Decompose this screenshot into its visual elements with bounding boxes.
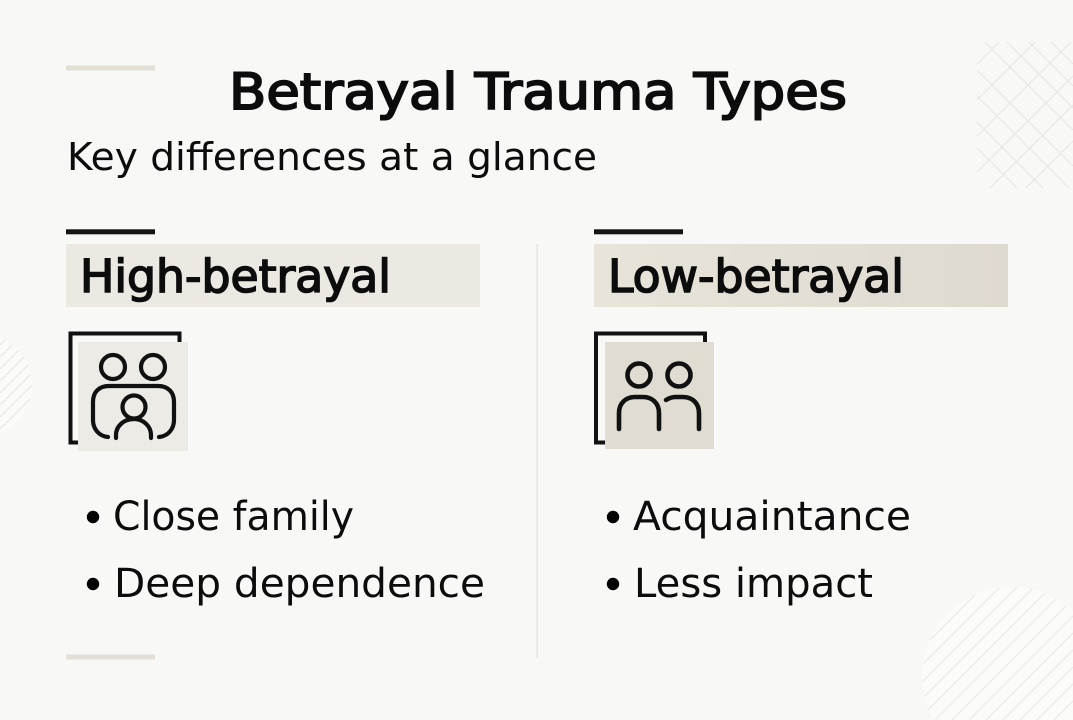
bullet list: high-betrayal bbox=[87, 494, 485, 607]
heading: low-betrayal: Low-betrayal bbox=[608, 250, 904, 303]
bullet list: low-betrayal: Acquaintance bbox=[633, 494, 911, 540]
bottom accent line bbox=[66, 654, 155, 660]
bullet list: high-betrayal: Close family bbox=[113, 494, 354, 540]
icon: family group bbox=[70, 334, 188, 451]
center divider bbox=[536, 244, 538, 658]
header band: low-betrayal bbox=[594, 244, 1008, 307]
top accent line bbox=[66, 66, 155, 70]
accent bar: low-betrayal bbox=[594, 229, 683, 234]
panel: high-betrayal bbox=[66, 229, 485, 607]
accent bar: high-betrayal bbox=[66, 229, 155, 234]
decorative stripes left edge bbox=[0, 337, 32, 433]
decorative stripes bottom right bbox=[922, 587, 1073, 720]
bullet list: low-betrayal bbox=[607, 494, 911, 607]
heading: high-betrayal: High-betrayal bbox=[80, 250, 391, 303]
bullet list: high-betrayal: Deep dependence bbox=[114, 561, 485, 607]
panel: low-betrayal bbox=[594, 229, 1008, 607]
header band: high-betrayal bbox=[66, 244, 480, 307]
title: Betrayal Trauma Types bbox=[229, 63, 847, 121]
decorative crosshatch top right bbox=[977, 42, 1073, 188]
subtitle: Key differences at a glance bbox=[67, 135, 597, 179]
icon: two acquaintances bbox=[596, 334, 714, 449]
bullet list: low-betrayal: Less impact bbox=[634, 561, 873, 607]
